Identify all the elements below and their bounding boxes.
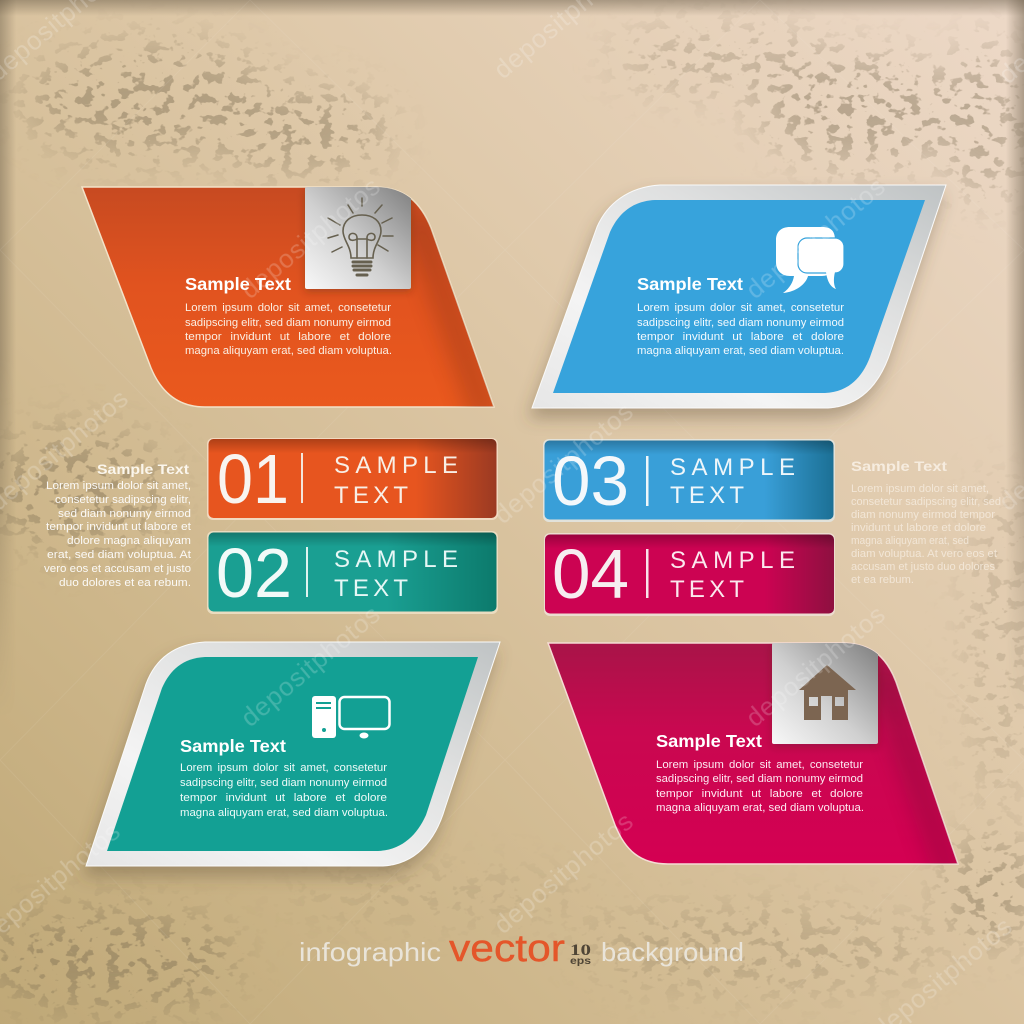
card 02: TEXT: [334, 575, 408, 602]
icon tile: house: [772, 643, 878, 744]
green body text: Lorem ipsum dolor sit amet, consetetur: [180, 762, 387, 774]
footer tagline: eps: [570, 956, 592, 967]
card 04: [544, 533, 835, 616]
right note heading: Sample Text: [851, 458, 947, 474]
left note body: dolore magna aliquyam: [67, 535, 191, 547]
magenta body text: sadipscing elitr, sed diam nonumy eirmod: [656, 773, 863, 785]
right note body: et ea rebum.: [851, 574, 914, 586]
magenta panel shape: [548, 643, 958, 864]
card 01: 01: [217, 440, 289, 518]
right note body: diam voluptua. At vero eos et: [851, 548, 997, 560]
card 04: 04: [552, 535, 629, 613]
right note body: Lorem ipsum dolor sit amet,: [851, 483, 989, 495]
footer tagline: 10: [570, 942, 591, 959]
blue body text: tempor invidunt ut labore et dolore: [637, 331, 844, 343]
footer tagline: [299, 928, 744, 970]
left note body: duo dolores et ea rebum.: [59, 577, 191, 589]
card 01: TEXT: [334, 482, 408, 509]
right note body: diam nonumy eirmod tempor: [851, 509, 995, 521]
icon tile: light bulb: [305, 187, 411, 289]
card 03: TEXT: [670, 482, 744, 509]
orange heading: Sample Text: [185, 274, 291, 294]
magenta right inner shade: [878, 660, 958, 864]
card 04: SAMPLE: [670, 547, 795, 574]
right side note: [851, 458, 1001, 586]
left note body: [44, 480, 191, 589]
stock watermarks: depositphotos: [235, 171, 386, 305]
blue body text: sadipscing elitr, sed diam nonumy eirmod: [637, 317, 844, 329]
left note body: vero eos et accusam et justo: [44, 563, 191, 575]
orange body text: Lorem ipsum dolor sit amet, consetetur: [185, 302, 391, 314]
blue heading: Sample Text: [637, 274, 743, 294]
right note body: accusam et justo duo dolores: [851, 561, 995, 573]
stock watermarks: depositphotos: [488, 806, 639, 940]
card 04: TEXT: [670, 576, 744, 603]
left note heading: Sample Text: [97, 461, 189, 477]
green body text: sadipscing elitr, sed diam nonumy eirmod: [180, 777, 387, 789]
left note body: sed diam nonumy eirmod: [58, 508, 191, 520]
blue body text: [637, 302, 844, 357]
panel: orange idea: [82, 187, 505, 420]
blue panel rim: [532, 185, 946, 408]
orange body text: [185, 302, 392, 357]
stock watermarks: depositphotos: [488, 396, 639, 530]
magenta body text: [656, 759, 864, 814]
left note body: tempor invidunt ut labore et: [46, 521, 191, 533]
icon: computer: [312, 696, 390, 738]
card 02: SAMPLE: [334, 546, 458, 573]
panel: magenta home: [548, 643, 968, 880]
icon: speech bubbles: [776, 227, 844, 293]
orange right inner shade: [411, 205, 494, 407]
magenta body text: magna aliquyam erat, sed diam voluptua.: [656, 802, 864, 814]
stock watermarks: depositphotos: [740, 599, 891, 733]
blue body text: Lorem ipsum dolor sit amet, consetetur: [637, 302, 844, 314]
magenta body text: Lorem ipsum dolor sit amet, consetetur: [656, 759, 863, 771]
left note body: Lorem ipsum dolor sit amet,: [46, 480, 191, 492]
card 03: [543, 439, 835, 522]
card 01: SAMPLE: [334, 452, 458, 479]
orange body text: tempor invidunt ut labore et dolore: [185, 331, 391, 343]
card 02: 02: [216, 534, 292, 612]
magenta heading: Sample Text: [656, 731, 762, 751]
footer tagline: vector: [449, 928, 565, 970]
green panel fill: [107, 657, 478, 851]
green body text: magna aliquyam erat, sed diam voluptua.: [180, 807, 388, 819]
footer tagline: background: [601, 937, 744, 967]
orange body text: magna aliquyam erat, sed diam voluptua.: [185, 345, 392, 357]
card 01: [207, 438, 498, 520]
panel: green computer: [86, 642, 500, 866]
left note body: erat, sed diam voluptua. At: [47, 549, 191, 561]
card 02: [207, 531, 498, 614]
right note body: magna aliquyam erat, sed: [851, 535, 969, 547]
stock watermarks: depositphotos: [740, 171, 891, 305]
green panel rim: [86, 642, 500, 866]
card 03: SAMPLE: [670, 454, 795, 481]
card 03: 03: [552, 442, 629, 520]
right note body: [851, 483, 1001, 586]
orange panel shape: [82, 187, 494, 407]
green body text: [180, 762, 388, 819]
blue body text: magna aliquyam erat, sed diam voluptua.: [637, 345, 844, 357]
icon: light bulb: [328, 198, 393, 275]
left note body: consetetur sadipscing elitr,: [55, 494, 191, 506]
green body text: tempor invidunt ut labore et dolore: [180, 792, 387, 804]
left side note: [44, 461, 191, 589]
magenta body text: tempor invidunt ut labore et dolore: [656, 788, 863, 800]
right note body: consetetur sadipscing elitr, sed: [851, 496, 1001, 508]
icon: house: [799, 665, 856, 720]
panel: blue communication: [532, 185, 946, 408]
stock watermarks: depositphotos: [235, 599, 386, 733]
right note body: invidunt ut labore et dolore: [851, 522, 986, 534]
footer tagline: infographic: [299, 937, 441, 967]
blue panel fill: [553, 200, 925, 393]
orange body text: sadipscing elitr, sed diam nonumy eirmod: [185, 317, 391, 329]
green heading: Sample Text: [180, 736, 286, 756]
